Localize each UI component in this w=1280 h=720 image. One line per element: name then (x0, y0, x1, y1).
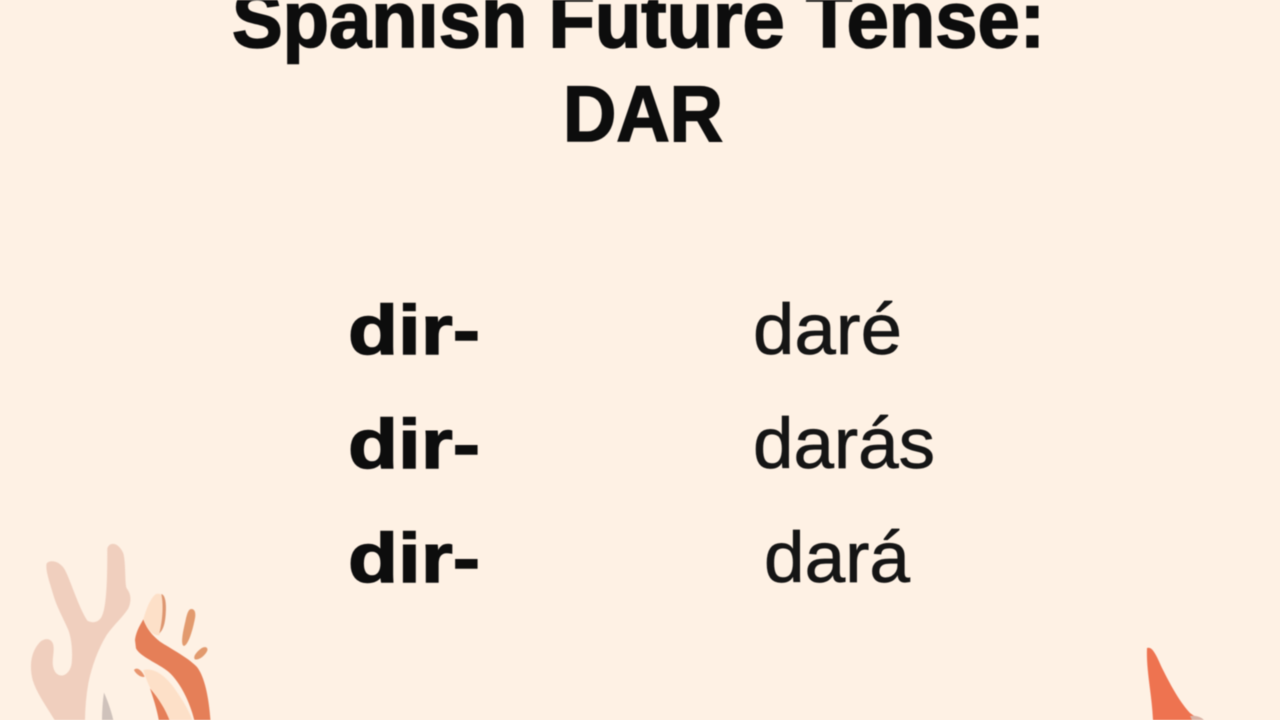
icon: orange coral frond (135, 619, 211, 720)
conjugation row: daré: daré (753, 291, 902, 370)
icon: grey spike (102, 693, 114, 720)
title (232, 0, 1045, 158)
icon: small frond leaf top (182, 609, 195, 646)
icon: cream frond tip (143, 594, 164, 635)
title: DAR (563, 69, 723, 158)
conjugation row: daré: dir- (348, 291, 480, 369)
icon: pale coral branch (31, 544, 130, 720)
conjugation row: darás: darás (753, 405, 935, 484)
conjugation row: darás: dir- (348, 405, 480, 483)
conjugation row: dará: dir- (348, 519, 480, 597)
icon: coral shadow (1190, 716, 1204, 720)
icon: small frond leaf lower (194, 647, 207, 660)
conjugation row: dará (348, 519, 911, 598)
icon: orange lower frond (150, 688, 171, 720)
conjugation row: darás (348, 405, 935, 484)
icon: frond tip shading (159, 594, 166, 633)
icon: orange coral bottom right (1147, 648, 1201, 720)
conjugation row: dará: dará (764, 519, 911, 598)
conjugation row: daré (348, 291, 902, 370)
icon: small orange leaf (134, 669, 145, 677)
icon: cream lower frond (143, 669, 193, 720)
icon: coral bottom left (31, 544, 211, 720)
